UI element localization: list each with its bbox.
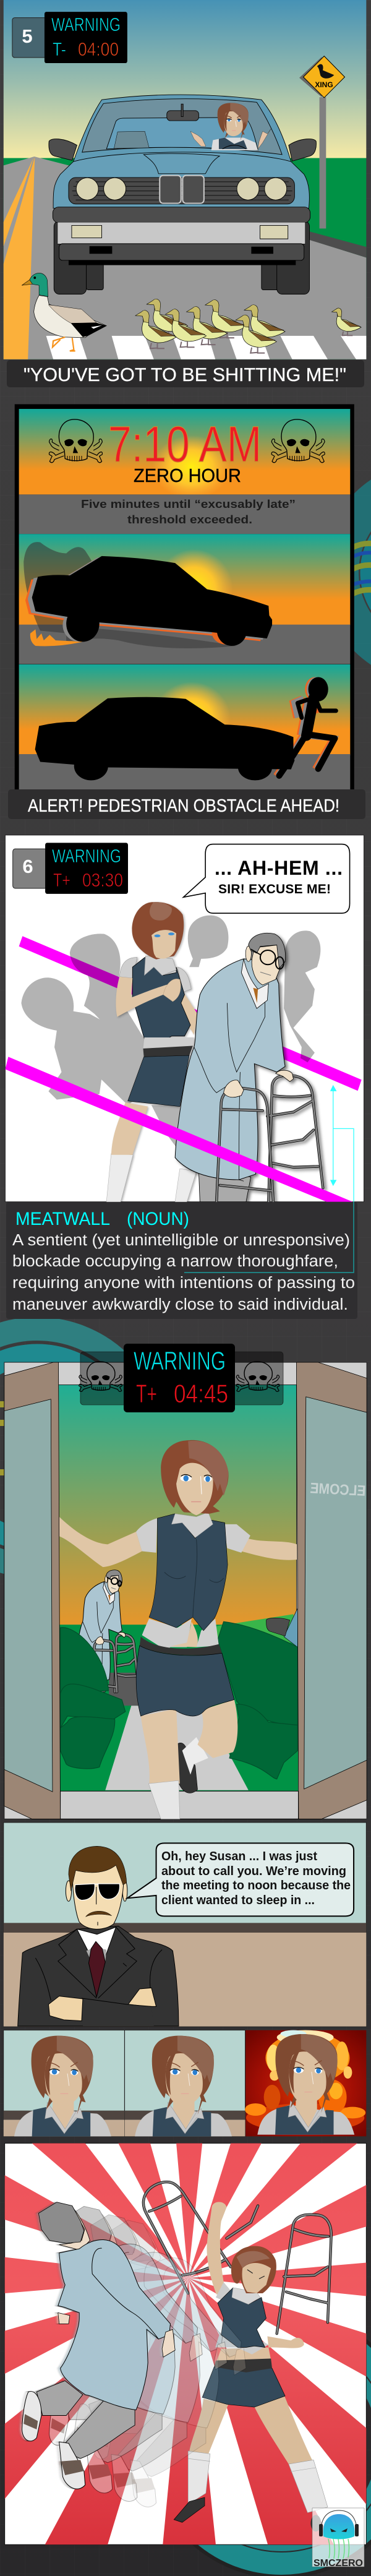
- countdown: 04:45: [174, 1379, 228, 1408]
- countdown: T-: [53, 38, 66, 60]
- speech text: [161, 1850, 351, 1907]
- teal callout line: [184, 1202, 354, 1273]
- speech text: SIR! EXCUSE ME!: [218, 882, 331, 896]
- warning label: WARNING: [52, 845, 121, 867]
- SMCZERO logo: [312, 2508, 364, 2569]
- runner ghost: [276, 677, 333, 776]
- caption bar: "YOU'VE GOT TO BE SHITTING ME!": [23, 364, 346, 385]
- falling old man ghosts: [49, 2206, 246, 2507]
- speech text: client wanted to sleep in ...: [161, 1894, 315, 1907]
- clock 7:10 AM: 7:10 AM: [108, 416, 262, 473]
- top magenta line: [19, 936, 362, 1091]
- SMCZERO logo: SMCZERO: [313, 2558, 363, 2569]
- old man in distance: [74, 1570, 139, 1692]
- mallard duck: [22, 273, 106, 351]
- threshold note: [81, 498, 296, 526]
- background swirl: bottom right: [148, 2311, 371, 2576]
- status box number: [12, 18, 46, 58]
- countdown: 04:00: [78, 38, 119, 60]
- panel number 6: 6: [22, 856, 33, 877]
- panel: doorway escape: [4, 1344, 367, 1819]
- ghost silhouettes: [21, 916, 320, 1152]
- countdown: [53, 869, 123, 891]
- definition text: requiring anyone with intentions of passing to: [12, 1274, 355, 1292]
- status box number: [13, 849, 47, 888]
- panel: zero hour: [8, 404, 365, 819]
- definition text: [12, 1232, 355, 1313]
- panel number 5: 5: [22, 25, 33, 47]
- LCD box: [45, 12, 127, 63]
- frame: [15, 404, 354, 796]
- floor: [61, 1791, 299, 1819]
- definition text: blockade occupying a narrow thoroughfare,: [12, 1253, 338, 1270]
- flying walker: [143, 2182, 331, 2333]
- grey strip: [19, 494, 350, 534]
- speech text: Oh, hey Susan ... I was just: [161, 1850, 317, 1863]
- woman: [106, 902, 198, 1202]
- definition heading: [15, 1209, 189, 1229]
- definition heading: (NOUN): [127, 1209, 189, 1229]
- LCD box: [124, 1344, 235, 1412]
- runner: [279, 677, 336, 776]
- scene: burnout car: [19, 534, 350, 664]
- definition box: [6, 1202, 357, 1319]
- speech text: the meeting to noon because the: [161, 1879, 351, 1892]
- threshold note: threshold exceeded.: [127, 513, 252, 526]
- speech text: [215, 857, 343, 896]
- running woman: [59, 1440, 297, 1819]
- caption bar: [8, 789, 365, 819]
- skull plate: [79, 1352, 283, 1405]
- countdown: [136, 1379, 228, 1408]
- old man with walker: [175, 933, 323, 1202]
- ducklings: [135, 299, 361, 353]
- scene: pedestrian: [19, 664, 350, 794]
- road: [4, 157, 366, 359]
- portrait 2: [125, 2030, 245, 2136]
- falling old man blur: [20, 2202, 173, 2489]
- grass: [4, 158, 366, 359]
- skull left: [79, 1362, 122, 1391]
- speech text: ... AH-HEM ...: [215, 857, 343, 879]
- speech bubble: [127, 1843, 354, 1916]
- falling old man: [22, 2202, 175, 2489]
- mirrored door lettering: ELCOME: [310, 1480, 366, 1500]
- sky: [59, 1385, 296, 1628]
- driver: [190, 103, 271, 150]
- threshold note: Five minutes until “excusably late”: [81, 498, 296, 510]
- panel: meatwall scene: [5, 835, 364, 1319]
- background swirl: right: [340, 479, 371, 665]
- manager figure: [18, 1846, 179, 2026]
- sign lettering: XING: [315, 80, 333, 89]
- yellow road lines: [4, 157, 35, 359]
- crosswalk: [46, 336, 366, 359]
- bottom magenta line: [5, 1057, 352, 1202]
- left door: [4, 1362, 61, 1819]
- panel: manager: [4, 1823, 366, 2136]
- caption bar: ALERT! PEDESTRIAN OBSTACLE AHEAD!: [28, 796, 339, 816]
- skull right: [271, 419, 325, 463]
- warning label: WARNING: [134, 1346, 226, 1375]
- speech text: about to call you. We’re moving: [161, 1865, 346, 1878]
- panel: sunburst finale: [5, 2143, 366, 2569]
- portrait 3 with explosion: [245, 2030, 366, 2136]
- victorious woman: [174, 2202, 328, 2531]
- right door: [296, 1362, 367, 1819]
- cyan dimension arrow: [331, 1086, 354, 1202]
- speech bubble: [184, 844, 350, 913]
- warning label: WARNING: [51, 14, 121, 35]
- LCD box: [45, 843, 128, 894]
- sunburst rays: [5, 2143, 366, 2544]
- walkway: [105, 1706, 249, 1790]
- mushroom cloud: [245, 2030, 365, 2132]
- lawn: [59, 1625, 298, 1791]
- door scene: [4, 1362, 367, 1819]
- zero hour heading: ZERO HOUR: [134, 465, 241, 486]
- bushes: [61, 1621, 297, 1779]
- sky: [4, 0, 366, 158]
- countdown: [53, 38, 119, 60]
- definition text: A sentient (yet unintelligible or unresponsive): [12, 1232, 350, 1249]
- background swirl: left: [0, 1329, 156, 1566]
- countdown: T+: [53, 869, 70, 891]
- parked car: [266, 1608, 297, 1647]
- countdown: 03:30: [82, 869, 123, 891]
- portrait 1: [4, 2030, 124, 2136]
- skull right: [236, 1362, 279, 1391]
- definition text: maneuver awkwardly close to said individual.: [12, 1296, 348, 1313]
- clock scene background: [19, 409, 350, 499]
- road shoulder: [305, 230, 366, 257]
- car: [49, 95, 316, 294]
- countdown: T+: [136, 1379, 157, 1408]
- panel: duck crossing: [4, 0, 366, 387]
- skull left: [49, 419, 102, 463]
- duck crossing sign: [299, 56, 345, 228]
- definition heading: MEATWALL: [15, 1209, 110, 1229]
- office wall: [4, 1823, 366, 2027]
